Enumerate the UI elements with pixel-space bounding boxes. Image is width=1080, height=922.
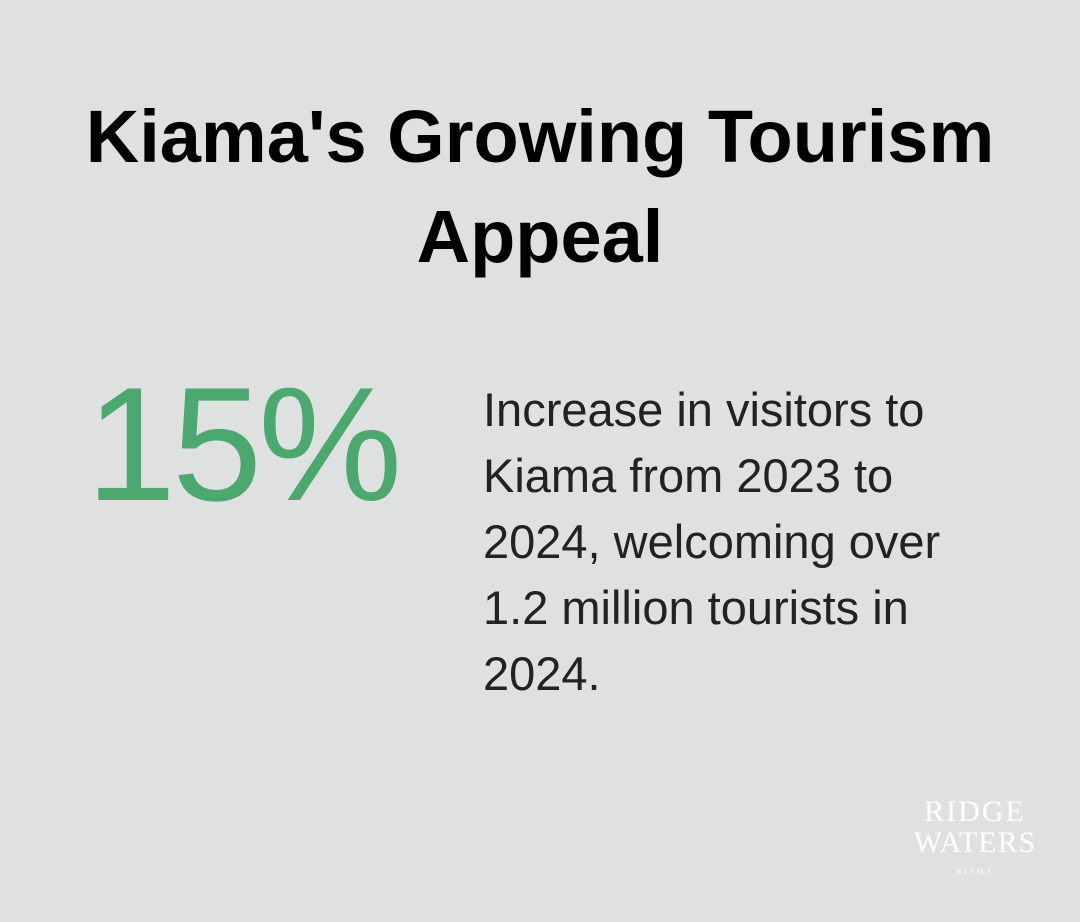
logo: Ridge Waters Kiama: RIDGE bbox=[924, 795, 1026, 828]
title bbox=[86, 95, 994, 278]
logo: Ridge Waters Kiama: KIAMA bbox=[956, 867, 994, 876]
description text: 1.2 million tourists in bbox=[483, 581, 909, 634]
logo: Ridge Waters Kiama bbox=[914, 795, 1036, 876]
logo: Ridge Waters Kiama: WATERS bbox=[914, 826, 1036, 859]
description text: 2024, welcoming over bbox=[483, 515, 940, 568]
big statistic: 15% bbox=[86, 354, 398, 535]
description text: Increase in visitors to bbox=[483, 383, 924, 436]
description text: 2024. bbox=[483, 647, 601, 700]
description text bbox=[483, 383, 940, 700]
title: Appeal bbox=[417, 195, 663, 278]
description text: Kiama from 2023 to bbox=[483, 449, 893, 502]
title: Kiama's Growing Tourism bbox=[86, 95, 994, 178]
